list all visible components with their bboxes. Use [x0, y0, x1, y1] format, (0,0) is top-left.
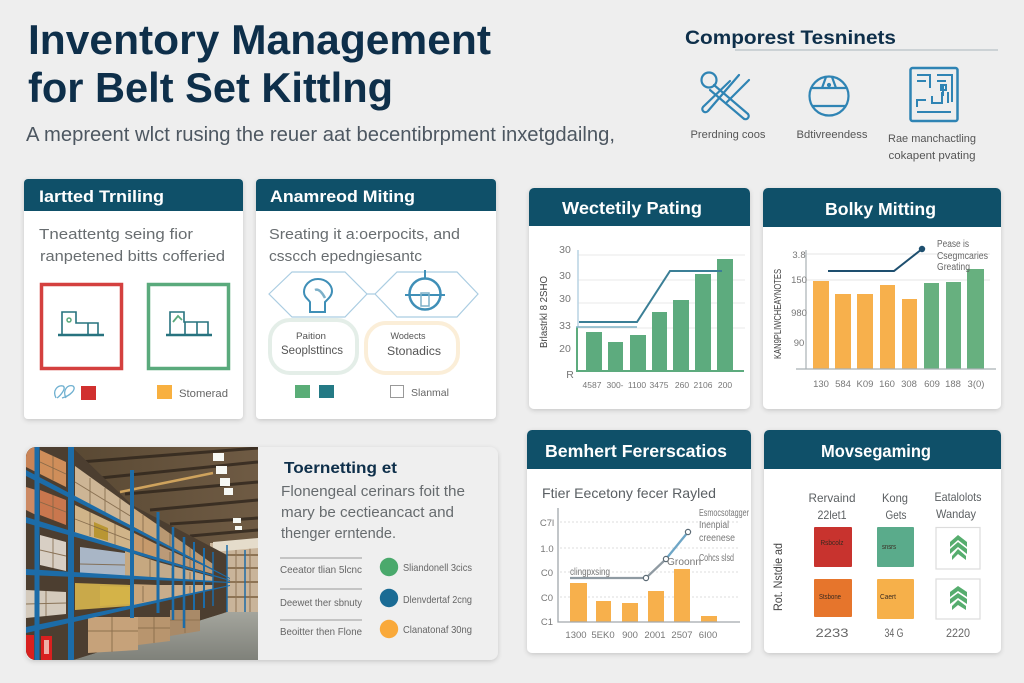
column headings: 22let1 — [818, 508, 847, 522]
subtitle: A mepreent wlct rusing the reuer aat becentibrpment inxetgdailng, — [26, 124, 615, 146]
combo chart: 1300 — [565, 630, 587, 641]
heading: component tests: Comporest Tesninets — [685, 28, 896, 49]
bar chart: 30 — [559, 293, 571, 305]
body text: Sreating it a:oerpocits, and — [269, 226, 460, 243]
bar chart: K09 — [857, 379, 873, 390]
comparison rows: Deewet ther sbnuty — [280, 597, 363, 609]
bar chart: 200 — [718, 380, 732, 390]
column headings: Rervaind — [808, 491, 856, 505]
bar chart: 150 — [791, 275, 807, 286]
panel heading: Iartted Trniling — [39, 187, 164, 206]
panel heading: Wectetily Pating — [562, 198, 702, 218]
column totals: 34 G — [884, 626, 904, 640]
comparison rows: Ceeator tlian 5lcnc — [280, 564, 362, 576]
combo chart: clingpxsing — [570, 567, 610, 578]
panel: bulky chart — [763, 188, 1001, 409]
bar chart: 584 — [835, 379, 851, 390]
bar chart: 3(0) — [968, 379, 984, 390]
body text: Tneattentg seing fior — [39, 226, 193, 243]
bar chart: Brlastrkl 8 2SHO — [539, 276, 550, 348]
column headings: Gets — [886, 508, 906, 522]
icon: crossed tools — [702, 72, 749, 119]
bar chart: 1100 — [628, 380, 646, 390]
column headings — [808, 490, 982, 522]
bar chart: 260 — [675, 380, 689, 390]
icon: green chevrons top — [936, 528, 980, 569]
bar chart: 980 — [791, 308, 807, 319]
legend — [295, 385, 449, 399]
panel: itemised kitting — [24, 179, 243, 419]
title: Inventory Management — [28, 16, 491, 63]
legend — [55, 385, 228, 400]
hexagon diagram — [269, 270, 478, 317]
description: thenger erntende. — [281, 526, 396, 542]
legend: Slanmal — [411, 387, 449, 399]
panel heading: Bolky Mitting — [825, 199, 936, 219]
panel: moving matrix — [764, 430, 1001, 653]
bar chart: Greating — [937, 262, 970, 273]
combo chart — [540, 508, 749, 641]
icon: circuit board — [910, 68, 958, 121]
pill: position — [270, 320, 357, 373]
panel header — [527, 430, 751, 469]
panel: component tests — [685, 28, 998, 162]
bar chart — [539, 244, 745, 390]
panel heading: Bemhert Fererscatios — [545, 441, 727, 461]
colour tile grid: snsrs — [882, 542, 896, 551]
bar chart: Csegmcaries — [937, 251, 988, 262]
panel header — [24, 179, 243, 211]
label: board: cokapent pvating — [888, 150, 976, 162]
description: Flonengeal cerinars foit the — [281, 484, 465, 500]
icon: green chevrons bottom — [936, 579, 980, 619]
column totals: 2233 — [816, 626, 849, 640]
panel header — [256, 179, 496, 211]
bar chart: 3475 — [650, 380, 669, 390]
combo chart: creenese — [699, 533, 735, 544]
body text: csscch epedngiesantc — [269, 248, 423, 265]
pill: position: Seoplsttincs — [281, 345, 343, 357]
column totals — [816, 626, 970, 640]
description: mary be cectieancact and — [281, 505, 454, 521]
combo chart: 6I00 — [699, 630, 717, 641]
body text: ranpetened bitts cofferied — [40, 248, 225, 265]
column totals: 2220 — [946, 626, 970, 640]
panel: benchmark forecasts — [527, 430, 751, 653]
combo chart: Cohcs slsd — [699, 553, 734, 564]
colour tile grid — [814, 527, 914, 619]
panel heading: Anamreod Miting — [270, 187, 415, 206]
icon: round gauge — [810, 76, 848, 116]
bar chart — [773, 239, 996, 390]
column headings: Wanday — [936, 507, 976, 521]
bar chart: 130 — [813, 379, 829, 390]
bar chart: KAN9PLIWCHEAYNOTES — [773, 269, 784, 359]
legend: Stomerad — [179, 388, 228, 400]
title: for Belt Set Kittlng — [28, 64, 393, 111]
pill: products: Wodects — [390, 331, 426, 342]
chart subtitle: Ftier Eecetony fecer Rayled — [542, 485, 716, 501]
bar chart: 609 — [924, 379, 940, 390]
bar chart: 300- — [606, 380, 624, 390]
combo chart: 1.0 — [540, 544, 554, 555]
colour tile grid: Caert — [880, 592, 897, 601]
column headings: Eatalolots — [934, 490, 982, 504]
combo chart: C1 — [541, 617, 553, 628]
combo chart: 900 — [622, 630, 638, 641]
combo chart: C0 — [541, 568, 553, 579]
bar chart: 20 — [559, 343, 571, 355]
colour tile grid: Rsbcolz — [820, 538, 844, 547]
row label: Rot. Nstdie ad — [771, 543, 785, 611]
title — [28, 16, 491, 111]
pill: products — [366, 323, 458, 373]
label: board — [888, 133, 976, 162]
combo chart: C7l — [540, 518, 554, 529]
bar chart: R — [566, 369, 574, 381]
bar chart: 3.8 — [792, 250, 806, 261]
comparison rows: Beoitter then Flone — [280, 626, 362, 638]
bar chart: 2106 — [694, 380, 713, 390]
status legend: Clanatonaf 30ng — [403, 624, 472, 636]
pill: products: Stonadics — [387, 346, 441, 358]
description — [281, 484, 465, 542]
combo chart: Inenpial — [699, 520, 729, 531]
pill: position: Paition — [296, 331, 326, 342]
bar chart: 90 — [794, 338, 804, 349]
panel: warehouse — [26, 447, 498, 660]
panel: weekly chart — [529, 188, 750, 409]
bar chart: 30 — [559, 244, 571, 256]
bar chart: 160 — [879, 379, 895, 390]
panel header — [763, 188, 1001, 227]
combo chart: Groonn — [667, 557, 701, 568]
label: board: Rae manchactling — [888, 133, 976, 145]
label: tool: Prerdning coos — [690, 129, 766, 141]
warehouse photo — [26, 447, 258, 660]
label: gauge: Bdtivreendess — [796, 129, 868, 141]
panel heading: Movsegaming — [821, 441, 931, 461]
panel header — [764, 430, 1001, 469]
combo chart: 2001 — [644, 630, 666, 641]
body text — [269, 226, 460, 265]
bar chart: 308 — [901, 379, 917, 390]
colour tile grid: Stsbone — [819, 592, 841, 601]
column headings: Kong — [882, 491, 908, 505]
bar chart: 188 — [945, 379, 961, 390]
icon: green kit box — [148, 284, 228, 368]
icon: red kit box — [42, 284, 122, 368]
bar chart: 30 — [559, 270, 571, 282]
combo chart: C0 — [541, 593, 553, 604]
status legend: Dlenvdertaf 2cng — [403, 594, 472, 606]
panel header — [529, 188, 750, 226]
combo chart: 5EK0 — [591, 630, 615, 641]
bar chart: 4587 — [583, 380, 602, 390]
bar chart: Pease is — [937, 239, 969, 250]
status legend: Sliandonell 3cics — [403, 562, 472, 574]
heading: Toernetting et — [284, 460, 397, 477]
bar chart: 33 — [559, 320, 571, 332]
comparison rows — [280, 558, 363, 638]
combo chart: 2507 — [671, 630, 693, 641]
panel: animated mixing — [256, 179, 496, 419]
combo chart: Esmocsotagger — [699, 508, 749, 519]
body text — [39, 226, 225, 265]
status legend — [380, 558, 472, 638]
